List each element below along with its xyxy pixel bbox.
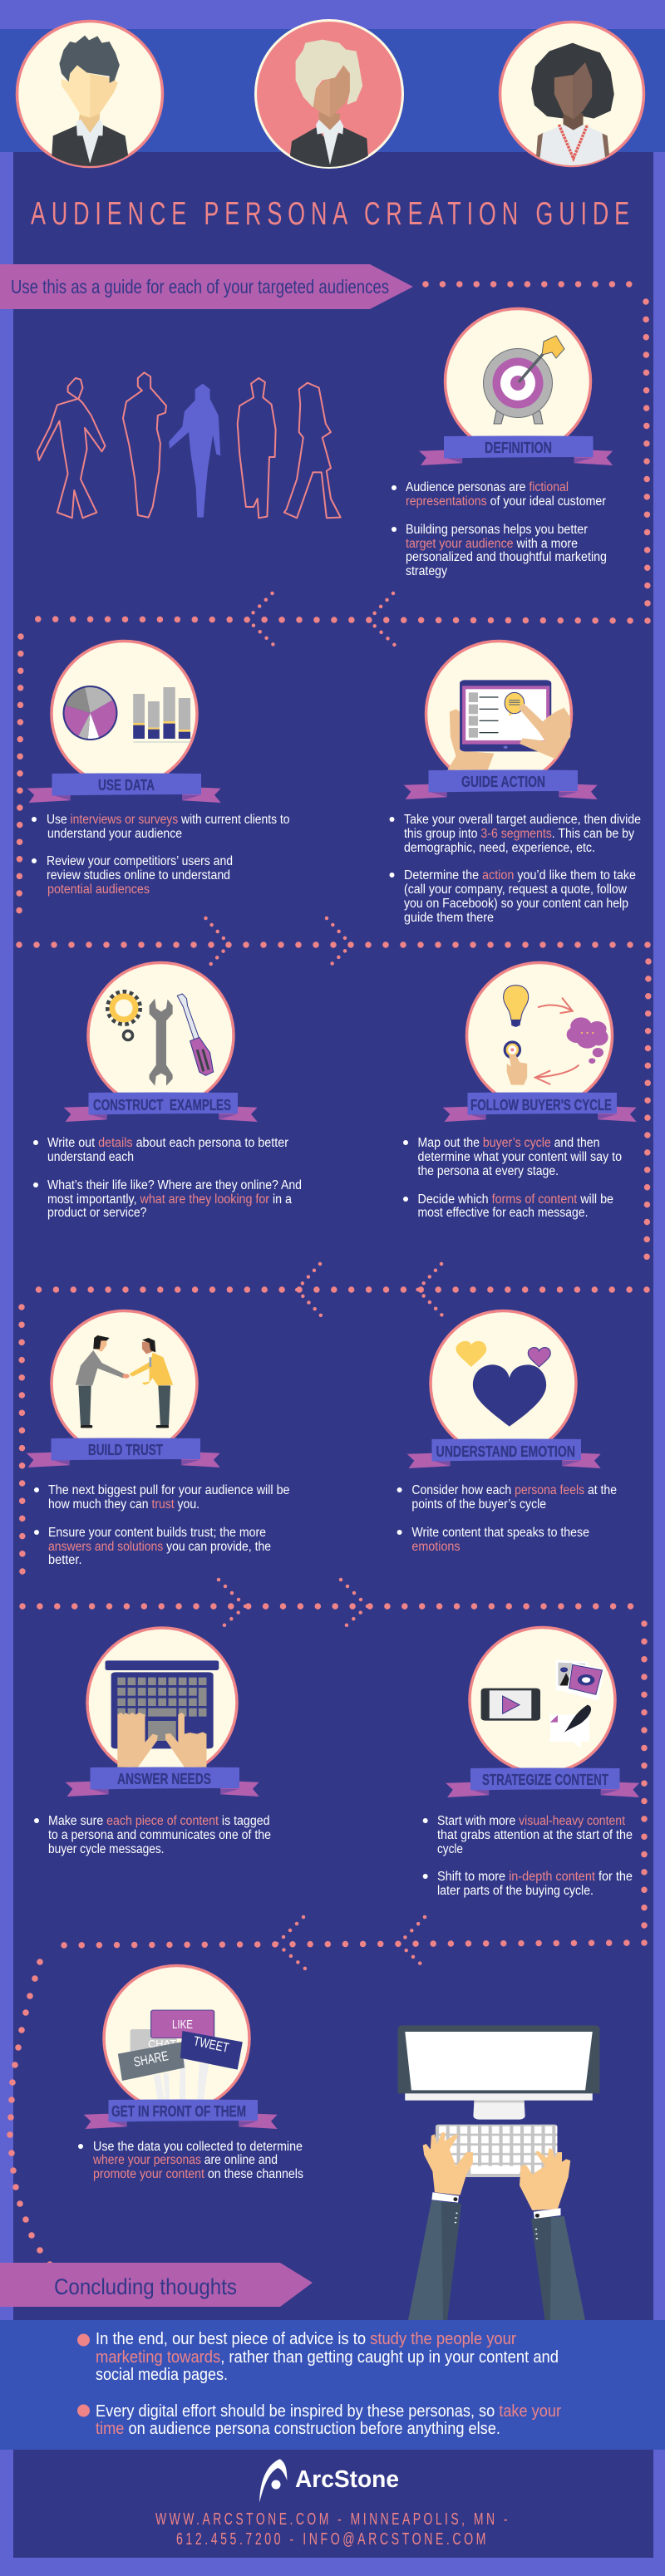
logo: ArcStone: ArcStone xyxy=(295,2466,399,2493)
text: definition bullets: Audience personas are fictional xyxy=(406,480,569,494)
text: conclusion xyxy=(77,2330,561,2438)
text: answer needs bullet: buyer cycle messages. xyxy=(48,1842,165,1856)
text: construct examples bullets: most importantly, what are they looking for in a xyxy=(47,1192,292,1207)
banner: concluding thoughts xyxy=(0,2263,313,2307)
silhouettes of audience personas xyxy=(37,372,341,518)
ribbon: answer needs xyxy=(66,1767,259,1797)
text: follow buyer's cycle bullets xyxy=(403,1136,622,1220)
text: get in front of them bullet: Use the data you collected to determine xyxy=(93,2140,303,2154)
panel: construct examples xyxy=(33,962,302,1220)
text: use data bullets: Review your competitiors’ users and xyxy=(47,854,233,868)
text: conclusion: Every digital effort should be inspired by these personas, so take your xyxy=(96,2402,561,2421)
icon: hands on a laptop keyboard xyxy=(87,1628,237,1777)
text: answer needs bullet: to a persona and communicates one of the xyxy=(48,1828,271,1842)
ribbon: guide action: GUIDE ACTION xyxy=(461,773,545,790)
text: follow buyer's cycle bullets: most effective for each message. xyxy=(417,1206,589,1220)
text: follow buyer's cycle bullets: determine what your content will say to xyxy=(417,1150,622,1164)
text: construct examples bullets: product or service? xyxy=(47,1206,147,1220)
text: conclusion: In the end, our best piece of advice is to study the people your xyxy=(96,2330,516,2348)
ribbon: understand emotion xyxy=(407,1439,601,1468)
avatar: woman with dark hair and necklace xyxy=(500,22,643,169)
icon: social signs: LIKE xyxy=(172,2018,193,2032)
panel: build trust xyxy=(27,1311,289,1567)
text: guide action bullets: this group into 3-6 segments. This can be by xyxy=(404,827,634,841)
text: strategize content bullets: cycle xyxy=(437,1842,463,1856)
banner: use this as a guide xyxy=(0,264,413,309)
footer contact details: 612.455.7200 - INFO@ARCSTONE.COM xyxy=(176,2530,489,2549)
icon: social signs xyxy=(104,1966,249,2111)
ribbon: definition: DEFINITION xyxy=(485,439,552,456)
text: follow buyer's cycle bullets: the persona at every stage. xyxy=(417,1164,559,1178)
text: build trust bullets: Ensure your content builds trust; the more xyxy=(48,1526,266,1540)
panel: guide action xyxy=(389,642,641,925)
panel: understand emotion xyxy=(397,1311,617,1554)
panel: follow buyer's cycle xyxy=(403,962,637,1220)
ribbon: follow buyer's cycle xyxy=(443,1092,637,1122)
text: construct examples bullets xyxy=(33,1136,302,1220)
icon: pie and bar charts xyxy=(52,642,197,786)
text: build trust bullets: answers and solutions you can provide, the xyxy=(48,1540,271,1554)
panel: answer needs xyxy=(34,1628,271,1856)
text: construct examples bullets: Write out details about each persona to better xyxy=(47,1136,288,1150)
ribbon: use data xyxy=(27,773,221,803)
text: answer needs bullet xyxy=(34,1814,271,1856)
icon: social signs: SHARE xyxy=(133,2049,170,2070)
text: construct examples bullets: understand each xyxy=(47,1150,134,1164)
text: get in front of them bullet: where your personas are online and xyxy=(92,2153,278,2167)
text: strategize content bullets: that grabs attention at the start of the xyxy=(437,1828,633,1842)
ribbon: follow buyer's cycle: FOLLOW BUYER'S CYCLE xyxy=(470,1096,612,1113)
icon: social signs: CHAT xyxy=(148,2038,176,2050)
text: strategize content bullets: Start with more visual-heavy content xyxy=(437,1814,626,1828)
icon: tablet with hands xyxy=(426,642,572,786)
text: understand emotion bullets: emotions xyxy=(411,1540,461,1554)
footer contact details: WWW.ARCSTONE.COM - MINNEAPOLIS, MN - xyxy=(155,2510,510,2529)
text: guide action bullets xyxy=(389,813,641,925)
text: conclusion: marketing towards, rather than getting caught up in your content and xyxy=(96,2348,559,2367)
ribbon: get in front of them: GET IN FRONT OF THEM xyxy=(111,2102,246,2120)
text: understand emotion bullets: points of the buyer’s cycle xyxy=(411,1497,546,1512)
text: strategize content bullets: Shift to more in-depth content for the xyxy=(437,1870,633,1884)
avatar: man with spiky hair xyxy=(17,22,163,169)
text: strategize content bullets xyxy=(423,1814,633,1898)
text: understand emotion bullets: Write content that speaks to these xyxy=(411,1526,589,1540)
text: follow buyer's cycle bullets: Map out the buyer’s cycle and then xyxy=(417,1136,600,1150)
text: strategize content bullets: later parts of the buying cycle. xyxy=(437,1884,594,1898)
text: guide action bullets: Determine the action you’d like them to take xyxy=(404,868,636,882)
text: follow buyer's cycle bullets: Decide which forms of content will be xyxy=(417,1192,613,1207)
avatar: woman with blonde hair xyxy=(256,20,402,169)
panel: get in front of them xyxy=(78,1966,303,2181)
icon: two people shaking hands xyxy=(52,1311,197,1456)
text: guide action bullets: guide them there xyxy=(404,911,494,925)
icon: social signs: TWEET xyxy=(192,2034,230,2056)
ribbon: build trust xyxy=(27,1438,220,1467)
ribbon: understand emotion: UNDERSTAND EMOTION xyxy=(436,1443,575,1460)
ribbon: get in front of them xyxy=(84,2099,278,2129)
text: definition bullets: strategy xyxy=(406,564,447,578)
icon: buyer's cycle with bulb, thought cloud and touch xyxy=(467,962,612,1109)
banner: concluding thoughts: Concluding thoughts xyxy=(54,2274,237,2299)
ribbon: construct examples xyxy=(64,1092,258,1122)
text: build trust bullets: how much they can trust you. xyxy=(48,1497,200,1512)
ribbon: construct examples: CONSTRUCT EXAMPLES xyxy=(93,1096,231,1113)
icon: target with arrow xyxy=(446,309,590,454)
banner: use this as a guide: Use this as a guide for each of your targeted audiences xyxy=(11,276,389,297)
text: guide action bullets: you on Facebook) so your content can help xyxy=(404,897,628,911)
text: construct examples bullets: What’s their life like? Where are they online? And xyxy=(47,1178,302,1192)
text: conclusion: time on audience persona construction before anything else. xyxy=(96,2420,500,2438)
ribbon: strategize content xyxy=(446,1768,639,1797)
text: definition bullets xyxy=(392,480,607,578)
text: understand emotion bullets xyxy=(397,1483,617,1554)
text: definition bullets: personalized and thoughtful marketing xyxy=(406,550,607,564)
text: guide action bullets: Take your overall target audience, then divide xyxy=(404,813,641,827)
icon: gears, wrench and screwdriver xyxy=(88,962,234,1109)
panel: strategize content xyxy=(423,1627,639,1898)
text: build trust bullets xyxy=(34,1483,289,1567)
text: get in front of them bullet: promote your content on these channels xyxy=(93,2167,303,2181)
text: definition bullets: Building personas helps you better xyxy=(406,523,588,537)
text: use data bullets: understand your audience xyxy=(47,827,182,841)
text: use data bullets: review studies online to understand xyxy=(47,868,230,882)
ribbon: strategize content: STRATEGIZE CONTENT xyxy=(482,1771,608,1788)
panel: definition xyxy=(392,309,613,578)
text: build trust bullets: better. xyxy=(48,1553,81,1567)
icon: video, photos and quill xyxy=(470,1627,615,1773)
text: use data bullets: potential audiences xyxy=(47,882,150,897)
text: understand emotion bullets: Consider how each persona feels at the xyxy=(411,1483,617,1497)
logo: ArcStone xyxy=(259,2459,399,2503)
ribbon: definition xyxy=(419,435,613,465)
ribbon: build trust: BUILD TRUST xyxy=(88,1441,164,1458)
ribbon: use data: USE DATA xyxy=(98,776,155,794)
panel: use data xyxy=(27,642,289,897)
text: conclusion: social media pages. xyxy=(96,2366,228,2384)
text: definition bullets: target your audience with a more xyxy=(406,537,578,551)
illustration: hands typing at a desktop computer xyxy=(398,2025,599,2320)
footer contact details xyxy=(155,2510,510,2549)
icon: hearts xyxy=(431,1311,576,1456)
text: answer needs bullet: Make sure each piece of content is tagged xyxy=(48,1814,269,1828)
text: use data bullets: Use interviews or surveys with current clients to xyxy=(47,813,289,827)
text: build trust bullets: The next biggest pull for your audience will be xyxy=(48,1483,289,1497)
text: guide action bullets: (call your company, request a quote, follow xyxy=(404,882,628,897)
ribbon: guide action xyxy=(404,769,598,799)
text: definition bullets: representations of your ideal customer xyxy=(406,494,606,509)
ribbon: answer needs: ANSWER NEEDS xyxy=(117,1770,211,1787)
text: use data bullets xyxy=(32,813,289,897)
text: guide action bullets: demographic, need, experience, etc. xyxy=(404,841,595,855)
text: get in front of them bullet xyxy=(78,2140,303,2181)
dotted path xyxy=(7,284,648,2268)
